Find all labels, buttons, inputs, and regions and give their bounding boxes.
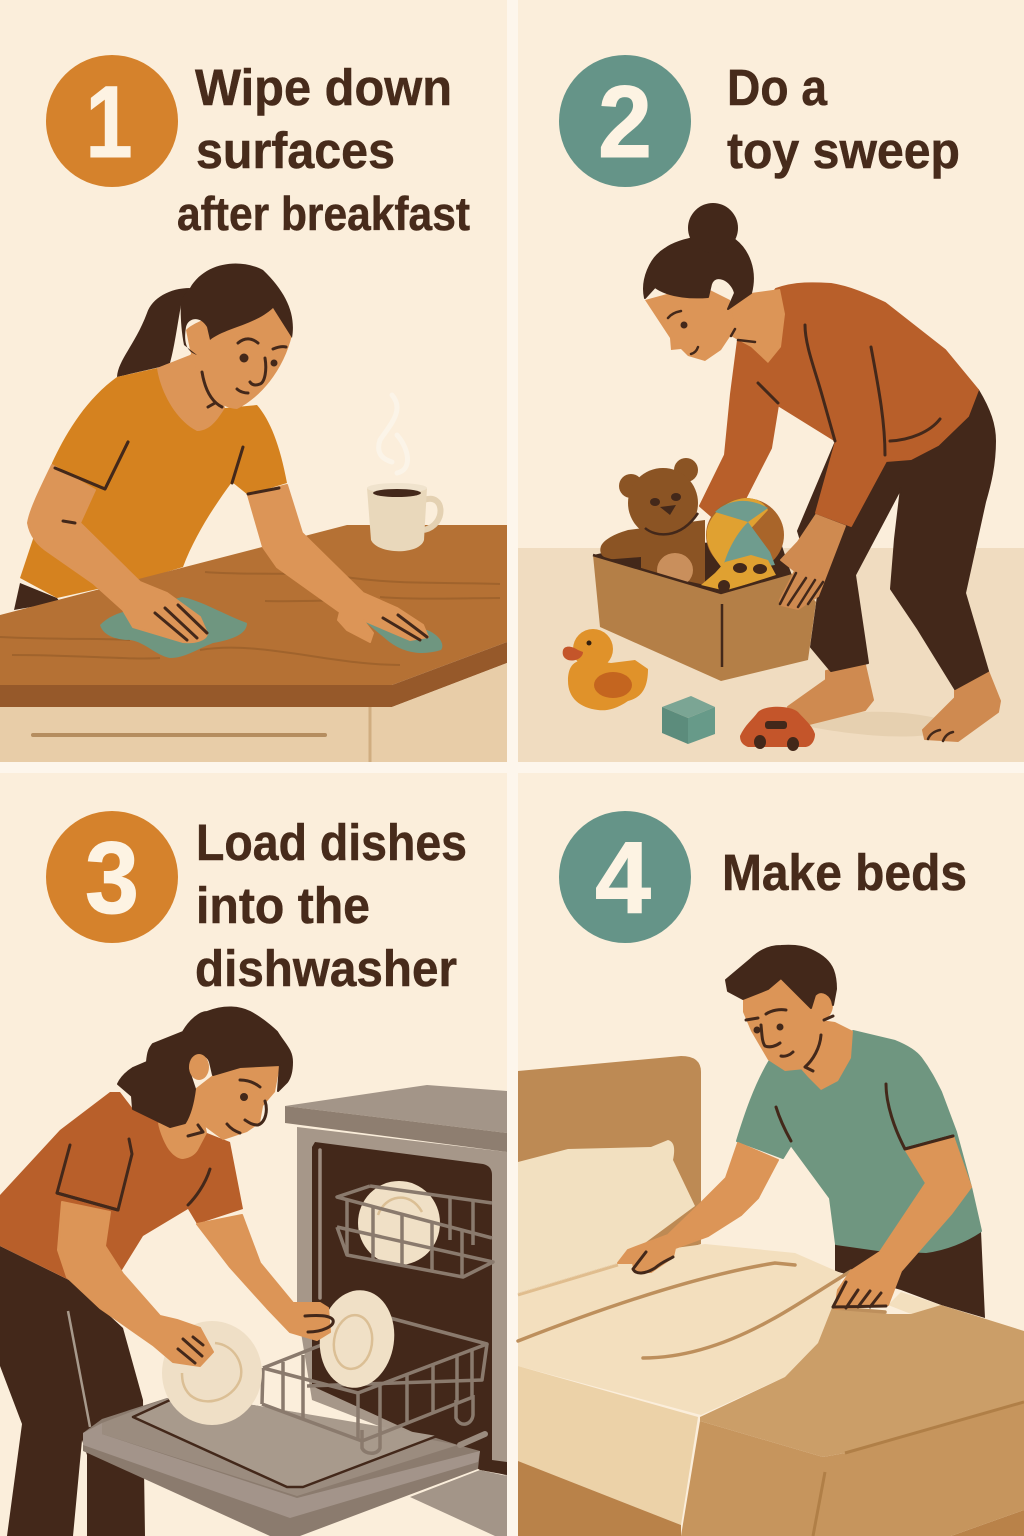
panel: toy sweep — [518, 0, 1024, 762]
illustration: man's body — [726, 946, 985, 1318]
panel: load dishwasher — [0, 773, 507, 1536]
icon: teddy bear — [600, 458, 705, 587]
illustration: woman's arms and hands — [28, 442, 428, 642]
icon: cleaning cloth left — [100, 597, 247, 658]
number badge 4: 4 — [595, 821, 651, 935]
icon: teal block — [662, 696, 715, 744]
number badge 3: 3 — [85, 821, 139, 935]
illustration: woman's torso and head — [14, 264, 293, 610]
heading: load dishes into the dishwasher — [195, 814, 467, 997]
illustration: woman's torso, head and arms — [0, 1007, 333, 1366]
heading: do a toy sweep: Do a — [727, 59, 828, 116]
icon: plate in upper rack — [358, 1181, 440, 1265]
illustration: bed with sheet and blanket — [518, 1244, 1024, 1536]
illustration: headboard and pillow — [518, 1056, 701, 1300]
heading: make beds: Make beds — [722, 844, 967, 901]
icon: coffee cup with steam — [367, 395, 441, 551]
number badge 2 — [559, 55, 691, 187]
upper rack — [337, 1186, 493, 1277]
heading: do a toy sweep: toy sweep — [727, 122, 960, 179]
illustration: wooden counter — [0, 525, 507, 762]
number badge 3 — [46, 811, 178, 943]
illustration: dishwasher body — [285, 1085, 507, 1536]
icon: plate in left hand — [162, 1321, 262, 1425]
illustration: woman's legs — [0, 1246, 145, 1536]
heading: load dishes into the dishwasher: dishwasher — [195, 940, 457, 997]
lower rack — [262, 1318, 487, 1453]
illustration: woman's near hand on the box — [780, 515, 845, 609]
icon: yellow toy car — [701, 555, 776, 592]
icon: plate in right hand — [314, 1285, 400, 1393]
illustration: man's arms and hands — [618, 1136, 971, 1309]
illustration: woman's body — [644, 203, 1000, 741]
icon: beach ball — [706, 498, 784, 572]
heading: load dishes into the dishwasher: Load dishes — [196, 814, 467, 871]
illustration: dishwasher door and lower rack — [83, 1318, 487, 1536]
number badge 4 — [559, 811, 691, 943]
heading: wipe down surfaces after breakfast: after breakfast — [177, 187, 470, 240]
number badge 2: 2 — [598, 65, 652, 179]
illustration: box of toys — [593, 458, 816, 681]
heading: wipe down surfaces after breakfast — [177, 59, 470, 240]
icon: rubber duck — [563, 629, 648, 710]
heading: wipe down surfaces after breakfast: surfaces — [196, 122, 395, 179]
heading: load dishes into the dishwasher: into the — [196, 877, 370, 934]
heading: wipe down surfaces after breakfast: Wipe down — [195, 59, 452, 116]
heading: do a toy sweep — [727, 59, 960, 179]
number badge 1 — [46, 55, 178, 187]
icon: cleaning cloth right — [363, 620, 442, 653]
panel: make beds — [518, 773, 1024, 1536]
icon: red toy car — [740, 707, 815, 751]
number badge 1: 1 — [86, 65, 132, 179]
panel: wipe down surfaces — [0, 0, 507, 762]
